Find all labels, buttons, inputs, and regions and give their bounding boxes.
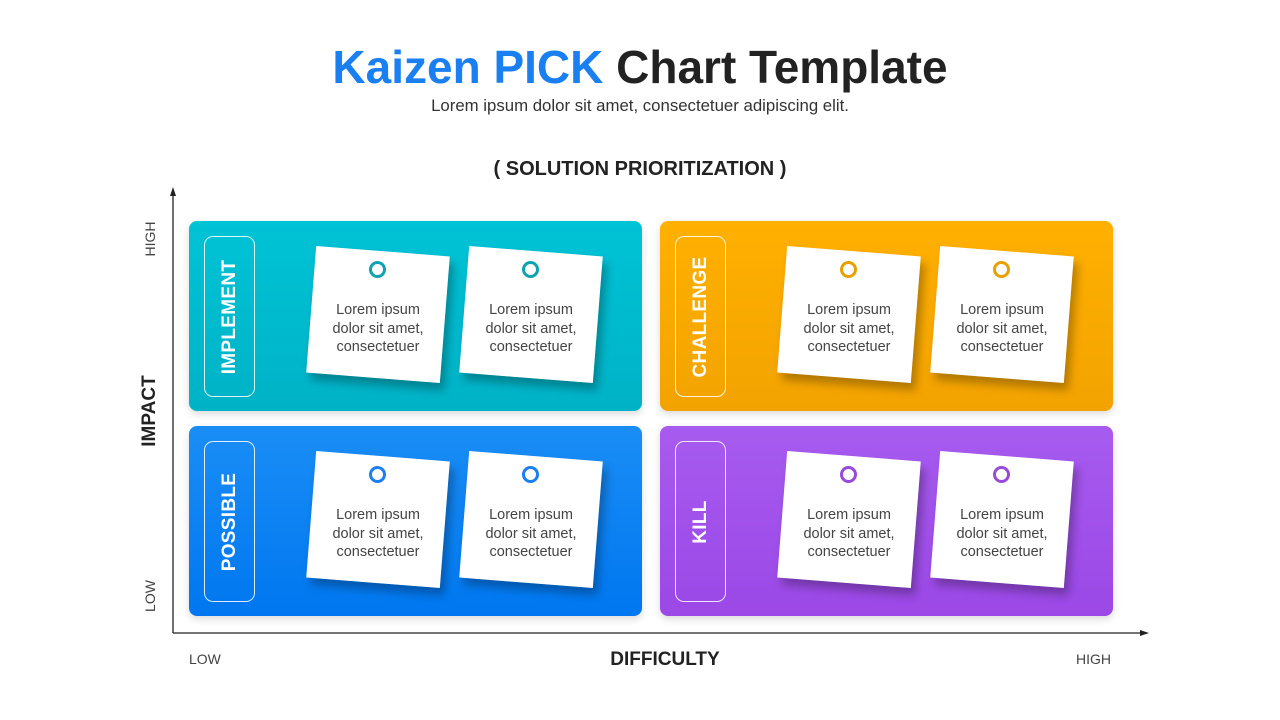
note 1: dolor sit amet, [803,320,895,336]
panel: kill [660,426,1113,616]
y label low: LOW [142,580,158,612]
label kill: KILL [690,500,710,543]
panel: challenge [660,221,1113,411]
note 1: consectetuer [336,339,420,355]
note 2: dolor sit amet, [485,320,577,336]
label implement: IMPLEMENT [218,259,240,374]
note 2: dolor sit amet, [485,526,577,542]
note 2: Lorem ipsum [960,507,1044,523]
note 1: dolor sit amet, [332,320,424,336]
note 1: consectetuer [336,544,420,560]
title: Kaizen PICK Chart Template [332,41,948,93]
note 2 [459,246,612,394]
note 1: dolor sit amet, [332,526,424,542]
x label difficulty: DIFFICULTY [610,649,720,670]
note 2: Lorem ipsum [489,507,573,523]
note 2 [459,451,612,600]
note 1: dolor sit amet, [803,526,895,542]
note 2: consectetuer [960,339,1044,355]
label possible: POSSIBLE [218,472,240,571]
label kill [675,441,726,602]
note 1 [777,451,930,600]
label challenge: CHALLENGE [690,256,710,377]
y label high: HIGH [142,222,158,256]
note 1: consectetuer [807,544,891,560]
x label low: LOW [189,651,221,667]
note 1: Lorem ipsum [336,507,420,523]
y label impact: IMPACT [139,375,160,447]
label implement [204,236,255,397]
panel: implement [189,221,642,411]
label possible [204,441,255,602]
note 1: Lorem ipsum [336,302,420,318]
note 1 [306,451,458,600]
note 1: consectetuer [807,339,891,355]
note 2: consectetuer [960,544,1044,560]
note 1: Lorem ipsum [807,302,891,318]
note 1: Lorem ipsum [807,507,891,523]
note 2: dolor sit amet, [956,320,1048,336]
note 2 [930,246,1082,394]
label challenge [675,236,726,397]
note 1 [306,246,458,394]
note 2: consectetuer [489,339,573,355]
subtitle: Lorem ipsum dolor sit amet, consectetuer adipiscing elit. [431,96,849,115]
x label high: HIGH [1076,651,1111,667]
panel: possible [189,426,642,616]
chart heading: ( SOLUTION PRIORITIZATION ) [494,158,786,180]
note 2: Lorem ipsum [489,302,573,318]
note 2: dolor sit amet, [956,526,1048,542]
note 2: consectetuer [489,544,573,560]
note 1 [777,246,930,394]
note 2 [930,451,1082,600]
note 2: Lorem ipsum [960,302,1044,318]
